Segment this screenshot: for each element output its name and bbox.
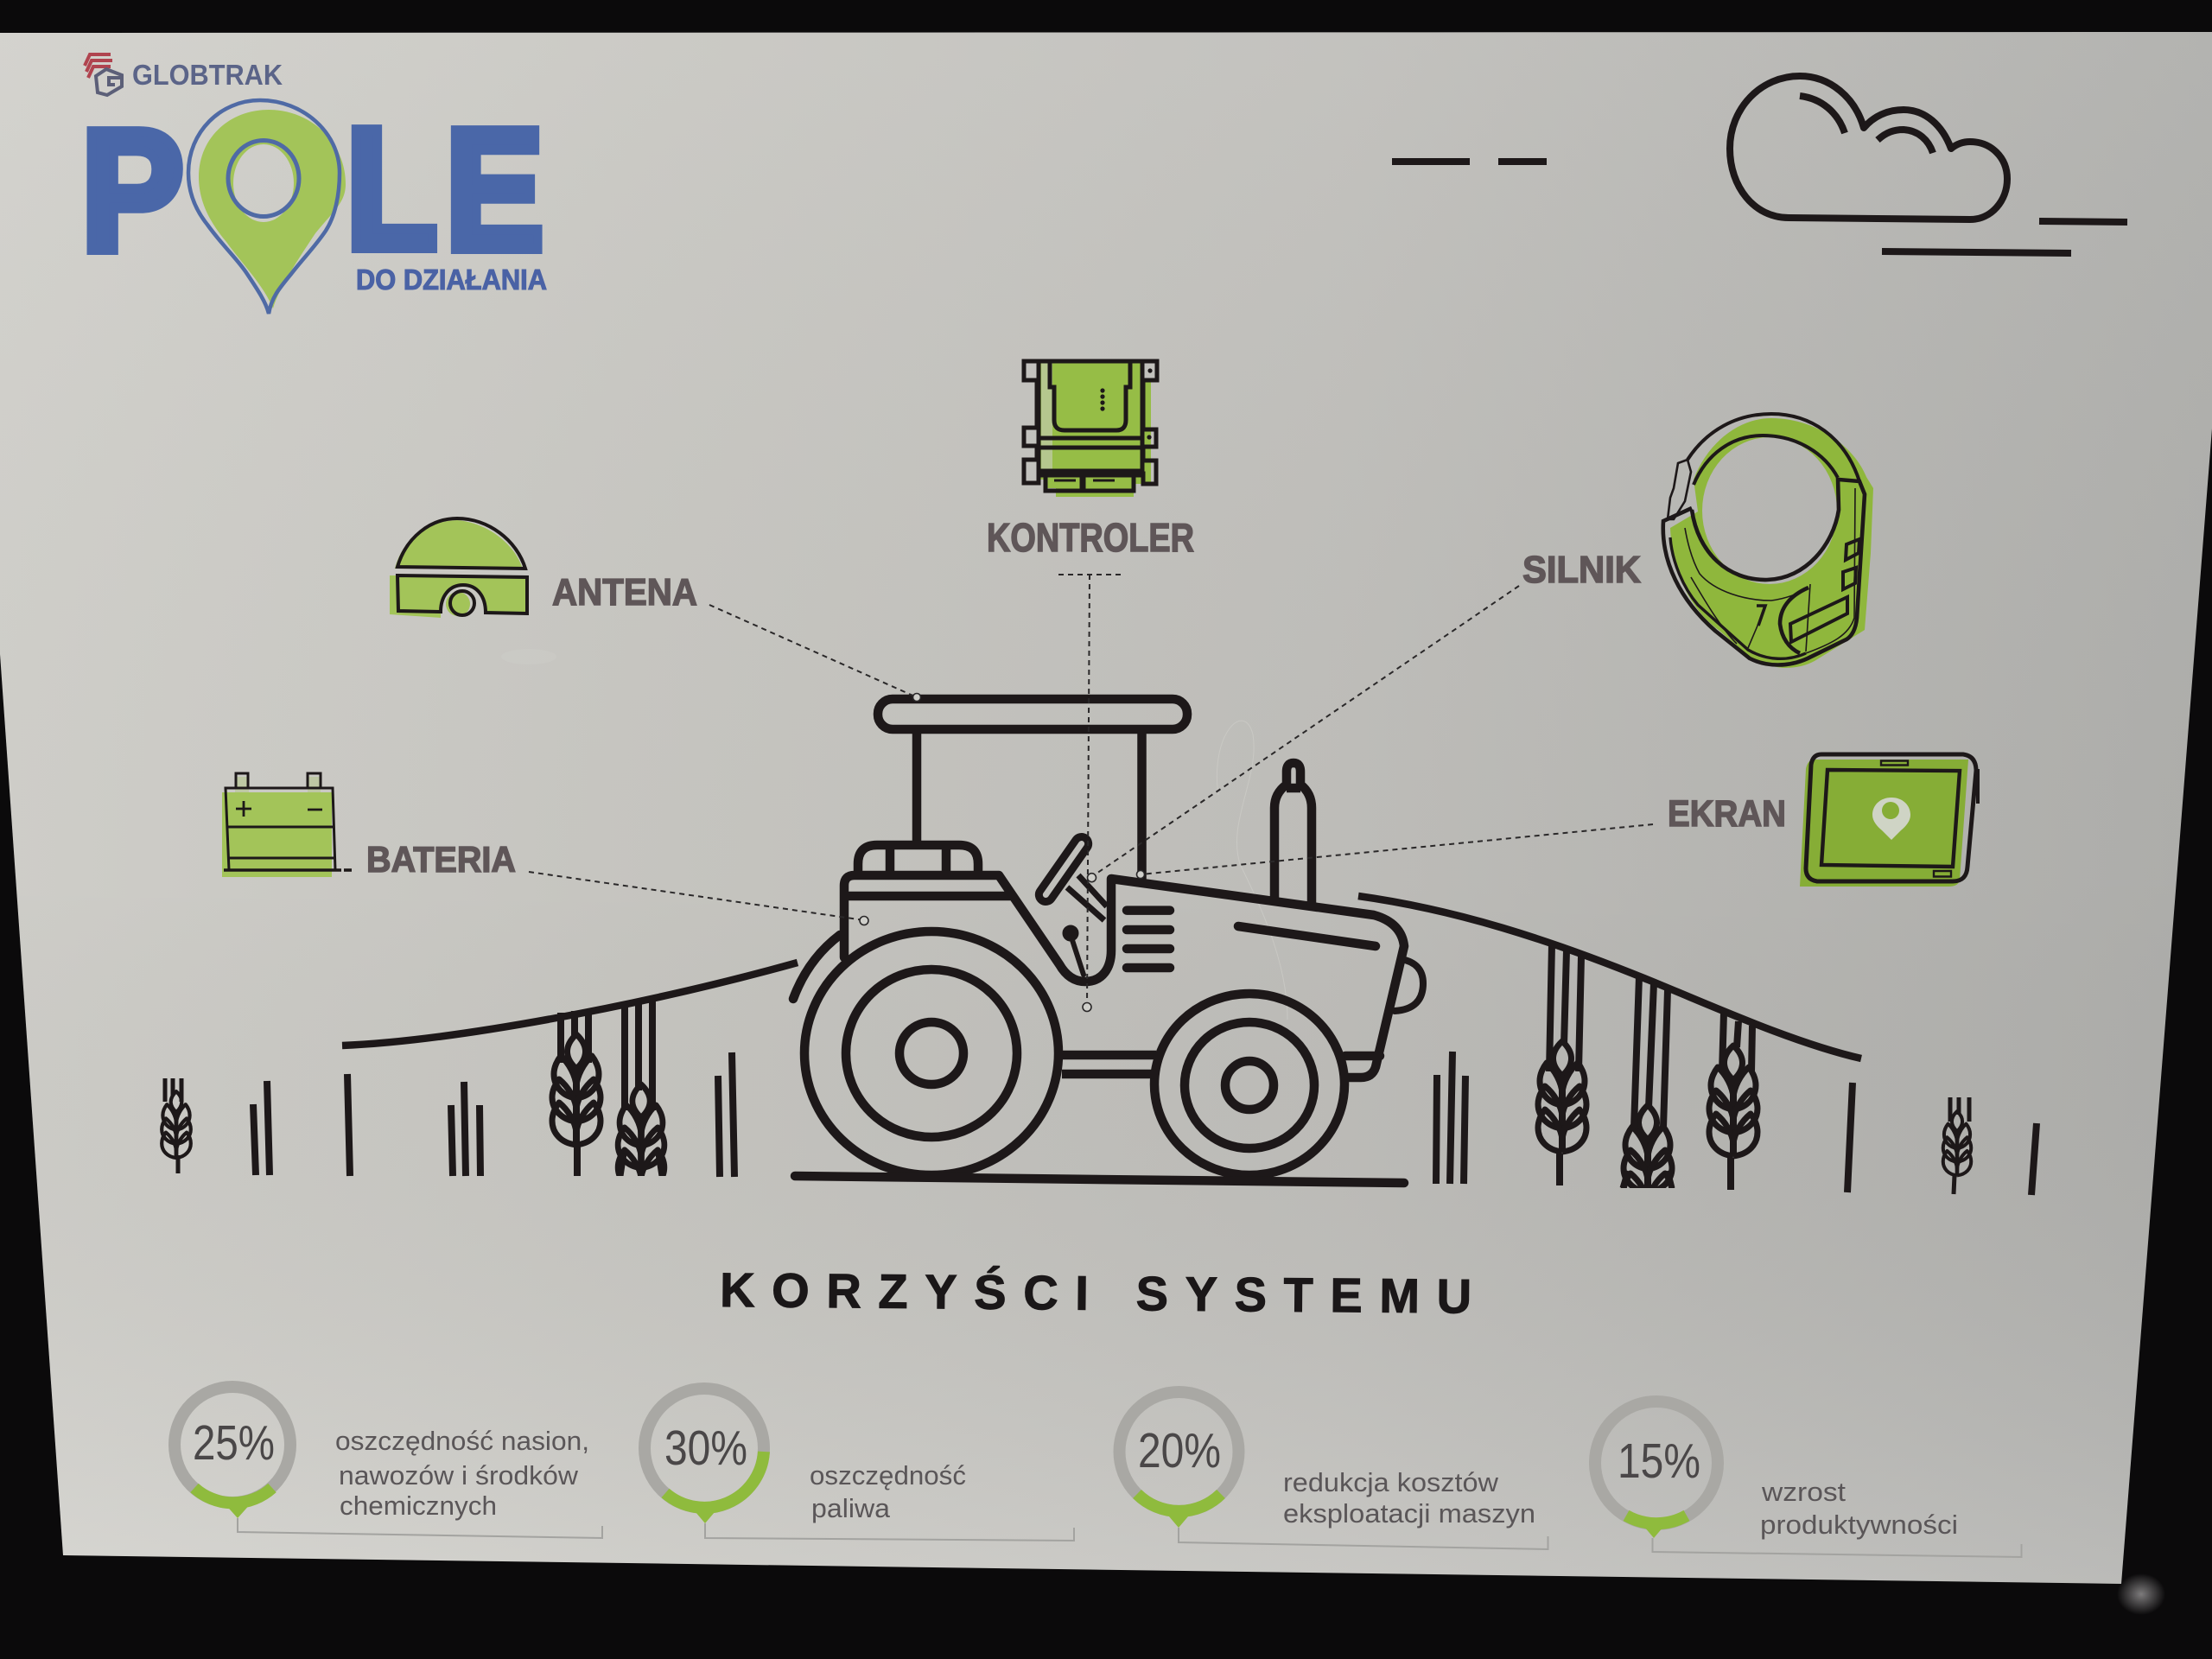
stat: 30%: 30% (664, 1421, 747, 1476)
logo word: E: E (446, 93, 543, 286)
illustration: tractor (793, 699, 1423, 1183)
crops: left field (162, 997, 734, 1191)
icon: wheat left 2 (618, 997, 664, 1191)
tractor posts (917, 734, 1142, 879)
icon: battery (222, 773, 352, 877)
tractor seat (858, 845, 978, 873)
tractor body (844, 875, 1404, 1077)
stat: 25%: 25% (193, 1415, 275, 1471)
label: controller: KONTROLER (987, 515, 1194, 560)
leader: antenna (709, 605, 917, 697)
stat: 25%: chemicznych (340, 1491, 497, 1521)
stat: 30%: oszczędność (810, 1460, 966, 1491)
hills (342, 896, 1861, 1058)
icon: wheat right 3 (1709, 1013, 1758, 1190)
stat: 15% (1595, 1402, 2022, 1557)
icon: small wheat left (162, 1078, 191, 1173)
leader: screen (1141, 824, 1653, 874)
ground line (795, 1176, 1404, 1183)
stat: 15%: wzrost (1761, 1477, 1846, 1507)
stat: 25%: nawozów i środków (339, 1460, 579, 1491)
rear fender (793, 935, 840, 999)
icon: controller (1024, 361, 1157, 497)
logo subtitle: DO DZIAŁANIA (356, 264, 547, 296)
rear wheel (804, 931, 1058, 1175)
stat: 20%: 20% (1138, 1423, 1221, 1478)
icon: antenna (390, 518, 527, 618)
stat: 25% (175, 1387, 602, 1538)
stat: 30%: paliwa (811, 1493, 891, 1523)
icon: screen tablet (1800, 754, 1978, 887)
hood highlight (1238, 926, 1376, 946)
label: battery: BATERIA (366, 839, 516, 880)
logo: Globtrak Pole do działania (81, 54, 547, 314)
tractor roof (878, 699, 1187, 729)
chassis bars (1062, 1055, 1156, 1074)
logo word: L: L (346, 92, 437, 285)
icon: engine (1663, 414, 1873, 668)
label: engine: SILNIK (1522, 549, 1641, 591)
hood vents (1127, 911, 1170, 968)
label: antenna: ANTENA (552, 571, 697, 613)
logo: map pin replacing the O (188, 100, 346, 314)
heading: benefits: KORZYŚCI SYSTEMU (720, 1262, 1471, 1324)
front wheel (1154, 994, 1344, 1175)
icon: wheat right 1 (1538, 944, 1586, 1185)
crops: right field (1436, 944, 2037, 1216)
leader: controller (1058, 575, 1121, 1007)
stat: 15%: produktywności (1760, 1510, 1958, 1540)
leader: engine (1091, 586, 1519, 877)
leader lines (529, 575, 1653, 1011)
stat: 30% (645, 1389, 1074, 1541)
leader: battery (529, 872, 864, 920)
icon: cloud with wind lines (1392, 76, 2127, 253)
label: screen: EKRAN (1668, 793, 1786, 835)
stat: 20%: eksploatacji maszyn (1283, 1498, 1535, 1529)
stat: 15%: 15% (1618, 1433, 1700, 1489)
stat: 20%: redukcja kosztów (1283, 1467, 1499, 1497)
icon: small wheat right (1943, 1097, 1971, 1194)
logo word: P: P (81, 94, 184, 286)
stat: 25%: oszczędność nasion, (335, 1426, 589, 1456)
steering wheel (1036, 834, 1107, 920)
stat: 20% (1120, 1392, 1548, 1549)
gear stick (1064, 926, 1084, 975)
icon: wheat left 1 (552, 1009, 601, 1176)
front hitch (1395, 959, 1423, 1011)
brand name: GLOBTRAK (132, 59, 283, 91)
icon: wheat right 2 (1623, 976, 1672, 1216)
exhaust pipe (1274, 763, 1312, 906)
icon: Globtrak mark (85, 54, 122, 95)
